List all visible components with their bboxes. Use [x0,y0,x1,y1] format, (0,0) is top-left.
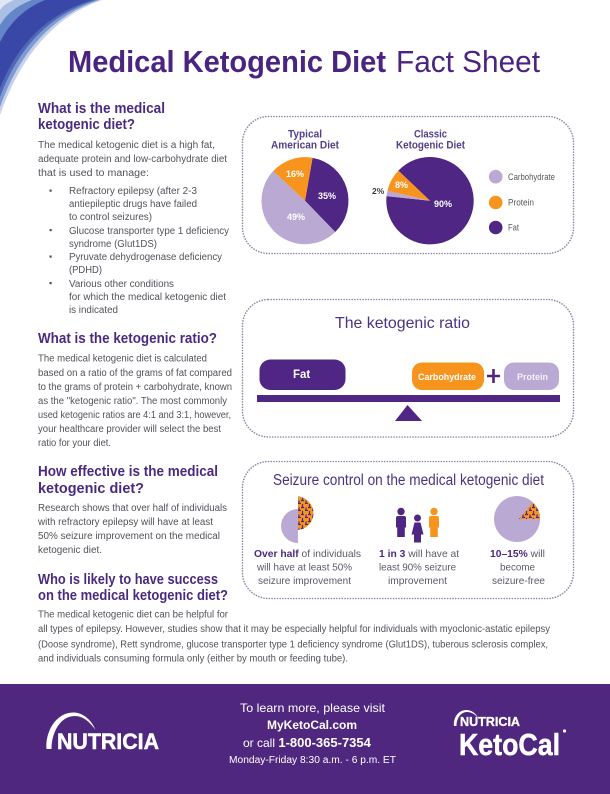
logo: KetoCal: KetoCal [459,727,560,762]
panel: the ketogenic ratio balance [242,300,574,437]
legend [489,170,555,234]
effectiveness text: with refractory epilepsy will have at least [37,517,213,528]
panel: seizure control [242,462,574,598]
bullet list of conditions [50,186,229,316]
pie chart: classic ketogenic diet: Ketogenic Diet [396,140,465,152]
bullet list of conditions: Refractory epilepsy (after 2-3 [69,186,198,197]
panel: diet comparison pie charts [242,116,574,254]
stat: 1 in 3 [379,549,459,587]
legend: Carbohydrate [508,172,555,182]
heading: what is the medical ketogenic diet [38,101,165,133]
pie chart: classic ketogenic diet [372,128,474,244]
balance beam [257,395,560,402]
plus sign [487,369,500,383]
carbohydrate pill [412,362,484,390]
title: Medical Ketogenic Diet [68,44,386,79]
contact text [229,701,396,766]
stat: over half: will have at least 50% [256,562,352,574]
heading: who is likely: on the medical ketogenic diet? [38,588,228,604]
contact text: MyKetoCal.com [267,718,357,732]
effectiveness text: ketogenic diet. [38,545,102,556]
seizure heading: Seizure control on the medical ketogenic diet [273,472,545,489]
pie chart: typical American diet [262,128,349,244]
effectiveness text [37,503,227,556]
fat pill [260,360,346,390]
heading: how effective: ketogenic diet? [38,481,144,497]
contact text: Monday-Friday 8:30 a.m. - 6 p.m. ET [229,755,396,766]
heading: who is likely: Who is likely to have success [38,572,218,588]
title: Fact Sheet [396,44,540,79]
stat: over half: seizure improvement [258,576,351,587]
success text [38,610,550,664]
fulcrum triangle [395,405,422,421]
ratio explanation text: The medical ketogenic diet is calculated [38,354,207,364]
success text: (Doose syndrome), Rett syndrome, glucose transporter type 1 deficiency syndrome (Glut1DS), tuberous sclerosis complex, [38,640,548,650]
stat: 10-15% [490,549,545,587]
protein pill: Protein [517,372,548,383]
logo: Nutricia: NUTRICIA [57,729,159,754]
fat pill: Fat [293,369,310,381]
stat: 1 in 3: least 90% seizure [379,562,456,574]
section: how effective [37,464,227,556]
stat: over half [254,549,361,587]
success text: and individuals consuming formula only (either by mouth or feeding tube). [38,654,348,664]
bullet list of conditions: Pyruvate dehydrogenase deficiency [69,252,222,263]
contact text: To learn more, please visit [240,701,386,715]
ratio explanation text: ratio for your diet. [38,438,111,449]
pie chart: typical American diet: 35% [318,191,336,201]
legend: Protein [508,198,534,208]
ratio explanation text: used ketogenic ratios are 4:1 and 3:1, however, [38,410,231,421]
ratio explanation text: as the "ketogenic ratio". The most commonly [38,396,227,407]
bullet list of conditions: antiepileptic drugs have failed [69,199,197,210]
heading: what is the medical ketogenic diet: ketogenic diet? [38,117,135,133]
stat: 1 in 3: improvement [388,576,447,587]
effectiveness text: 50% seizure improvement on the medical [38,531,220,542]
bullet list of conditions: is indicated [69,305,118,316]
stat: over half: Over half of individuals [254,549,361,560]
bullet list of conditions: syndrome (Glut1DS) [69,239,157,250]
intro text [38,140,227,179]
carbohydrate pill: Carbohydrate [418,372,476,383]
effectiveness text: Research shows that over half of individuals [38,503,227,514]
ratio explanation text: your healthcare provider will select the best [38,424,221,435]
heading: ketogenic ratio: What is the ketogenic ratio? [38,331,217,347]
stat: 10-15%: become [500,562,535,574]
logo: Nutricia [46,712,159,754]
ratio explanation text: to the grams of protein + carbohydrate, known [38,382,232,393]
ratio heading: The ketogenic ratio [335,315,470,332]
pie chart: typical American diet: American Diet [271,140,339,152]
stat: 1 in 3: 1 in 3 will have at [379,549,459,560]
success text: The medical ketogenic diet can be helpful for [38,610,229,620]
intro text: that is used to manage: [38,168,149,179]
ratio explanation text: based on a ratio of the grams of fat compared [38,368,232,379]
ratio explanation text [38,354,232,449]
bullet list of conditions: (PDHD) [69,265,102,276]
pie chart: classic ketogenic diet: 2% [372,186,385,196]
footer band [0,684,610,794]
intro text: adequate protein and low-carbohydrate diet [38,154,227,165]
decorative corner swoosh [0,0,102,115]
heading: what is the medical ketogenic diet: What is the medical [38,101,165,117]
bullet list of conditions: to control seizures) [69,212,152,223]
heading: how effective: How effective is the medical [38,464,218,480]
success text: all types of epilepsy. However, studies show that it may be especially helpful for individuals with myoclonic-astatic epilepsy [38,624,550,635]
logo: KetoCal: NUTRICIA [460,714,521,729]
section: what is the medical ketogenic diet [38,101,229,316]
icon: pie with small wedge [494,496,540,542]
icon: three people [396,508,439,542]
contact text: or call 1-800-365-7354 [243,735,372,750]
protein pill [504,362,559,390]
pie chart: typical American diet: 49% [287,212,305,222]
bullet list of conditions: Glucose transporter type 1 deficiency [69,226,229,237]
stat: 10-15%: seizure-free [492,576,545,587]
logo: KetoCal [454,710,566,762]
pie chart: typical American diet: 16% [286,169,304,179]
pie chart: classic ketogenic diet: 90% [434,199,452,209]
section: who is likely to have success [38,572,550,664]
intro text: The medical ketogenic diet is a high fat, [38,140,215,151]
bullet list of conditions: Various other conditions [69,279,174,290]
pie chart: classic ketogenic diet: 8% [395,180,408,190]
pie chart: typical American diet: Typical [288,128,322,140]
heading: how effective [38,464,218,497]
pie chart: classic ketogenic diet: Classic [414,128,447,140]
section: what is the ketogenic ratio [38,331,232,449]
bullet list of conditions: for which the medical ketogenic diet [69,292,226,303]
icon: half pie [281,496,314,543]
heading: who is likely [38,572,228,604]
legend: Fat [508,222,519,232]
stat: 10-15%: 10–15% will [490,549,545,560]
